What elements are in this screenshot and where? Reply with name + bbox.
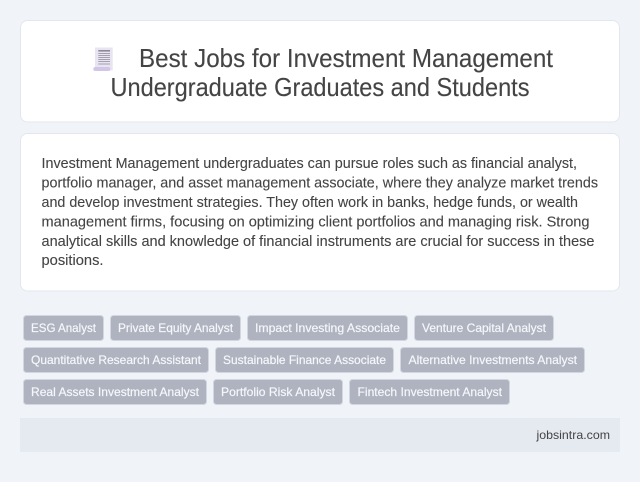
tag list [24,316,584,404]
description text: portfolio manager, and asset management associate, where they analyze market trends [42,176,598,192]
tag: Portfolio Risk Analyst: Portfolio Risk Analyst [221,385,336,399]
tag: Fintech Investment Analyst: Fintech Investment Analyst [358,385,503,399]
tag: Sustainable Finance Associate [216,348,394,372]
tag: Fintech Investment Analyst [350,380,510,404]
tag: Sustainable Finance Associate: Sustainable Finance Associate [223,353,386,367]
icon: document scroll [93,48,113,71]
tag: Private Equity Analyst [110,316,240,340]
tag: ESG Analyst [24,316,104,340]
tag: Private Equity Analyst: Private Equity Analyst [118,321,234,335]
tag: Venture Capital Analyst: Venture Capital Analyst [422,321,547,335]
description text [42,156,598,269]
footer bar [20,418,620,452]
tag: Alternative Investments Analyst: Alternative Investments Analyst [408,353,578,367]
panel: description [20,134,620,291]
description text: positions. [42,253,104,269]
description text: management firms, focusing on optimizing client portfolios and managing risk. Strong [42,214,590,230]
tag: Venture Capital Analyst [414,316,554,340]
footer source text: jobsintra.com [535,428,610,442]
tag: Quantitative Research Assistant: Quantitative Research Assistant [31,353,202,367]
tag: Real Assets Investment Analyst [24,380,206,404]
tag: Impact Investing Associate [248,316,408,340]
description text: analytical skills and knowledge of financial instruments are crucial for success in these [42,234,594,250]
description text: and develop investment strategies. They often work in banks, hedge funds, or wealth [42,195,578,211]
tag: ESG Analyst: ESG Analyst [31,321,97,335]
tag: Alternative Investments Analyst [400,348,584,372]
tag: Quantitative Research Assistant [24,348,208,372]
tag: Portfolio Risk Analyst [214,380,342,404]
title [110,45,553,102]
tag: Real Assets Investment Analyst: Real Assets Investment Analyst [31,385,200,399]
tag: Impact Investing Associate: Impact Investing Associate [255,321,400,335]
panel: header [20,20,620,122]
title: Undergraduate Graduates and Students [110,74,530,102]
title: Best Jobs for Investment Management [139,45,553,73]
description text: Investment Management undergraduates can pursue roles such as financial analyst, [42,156,577,172]
